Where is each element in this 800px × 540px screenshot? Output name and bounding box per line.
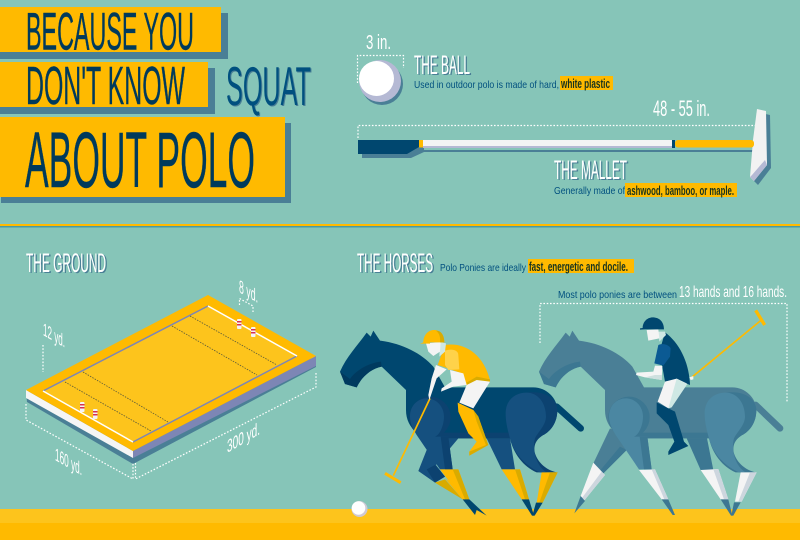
horses heading: THE HORSES — [357, 248, 433, 278]
horses heading: Most polo ponies are between — [558, 289, 677, 301]
panel: the ball: white plastic — [560, 76, 610, 91]
polo mallet — [385, 398, 430, 483]
panel: the mallet: 48 - 55 in. — [653, 96, 710, 121]
horses heading: Polo Ponies are ideally — [440, 262, 527, 274]
panel: the ball: Used in outdoor polo is made of hard, — [414, 79, 559, 91]
field platform — [26, 295, 316, 464]
text: SQUAT — [227, 56, 312, 118]
panel: the ground — [26, 248, 316, 480]
section divider — [0, 224, 800, 228]
panel: the mallet: THE MALLET — [556, 156, 628, 186]
horses heading: fast, energetic and docile. — [529, 259, 628, 274]
dimensions: 300 yd. — [227, 418, 260, 458]
horse and rider: blue — [539, 310, 780, 516]
title: ABOUT POLO — [25, 115, 255, 204]
panel: the ball — [358, 32, 613, 105]
panel: the mallet — [358, 96, 771, 198]
polo mallet — [692, 310, 765, 377]
ground strip — [0, 509, 800, 540]
dimensions: 12 yd. — [43, 319, 65, 352]
horse and rider: yellow — [340, 330, 581, 516]
horses heading — [357, 248, 787, 402]
panel: the ground: THE GROUND — [28, 249, 108, 279]
text: SQUAT — [226, 55, 311, 117]
panel: the mallet: THE MALLET — [554, 155, 627, 185]
dimensions — [26, 276, 316, 480]
rider — [420, 330, 490, 456]
rider — [636, 317, 693, 455]
dimensions: 160 yd. — [55, 444, 82, 480]
panel: the mallet: Generally made of — [554, 185, 625, 197]
title: DON'T KNOW — [26, 56, 185, 116]
panel: the ball: 3 in. — [366, 32, 391, 54]
polo ball on ground — [352, 501, 368, 517]
panel: the ball: THE BALL — [416, 51, 472, 81]
title: BECAUSE YOU — [26, 2, 194, 62]
panel: the ground: THE GROUND — [26, 248, 106, 278]
dimensions: 8 yd. — [239, 276, 258, 308]
panel: the ball: THE BALL — [414, 50, 470, 80]
title — [0, 2, 312, 204]
horses heading: THE HORSES — [358, 249, 434, 279]
